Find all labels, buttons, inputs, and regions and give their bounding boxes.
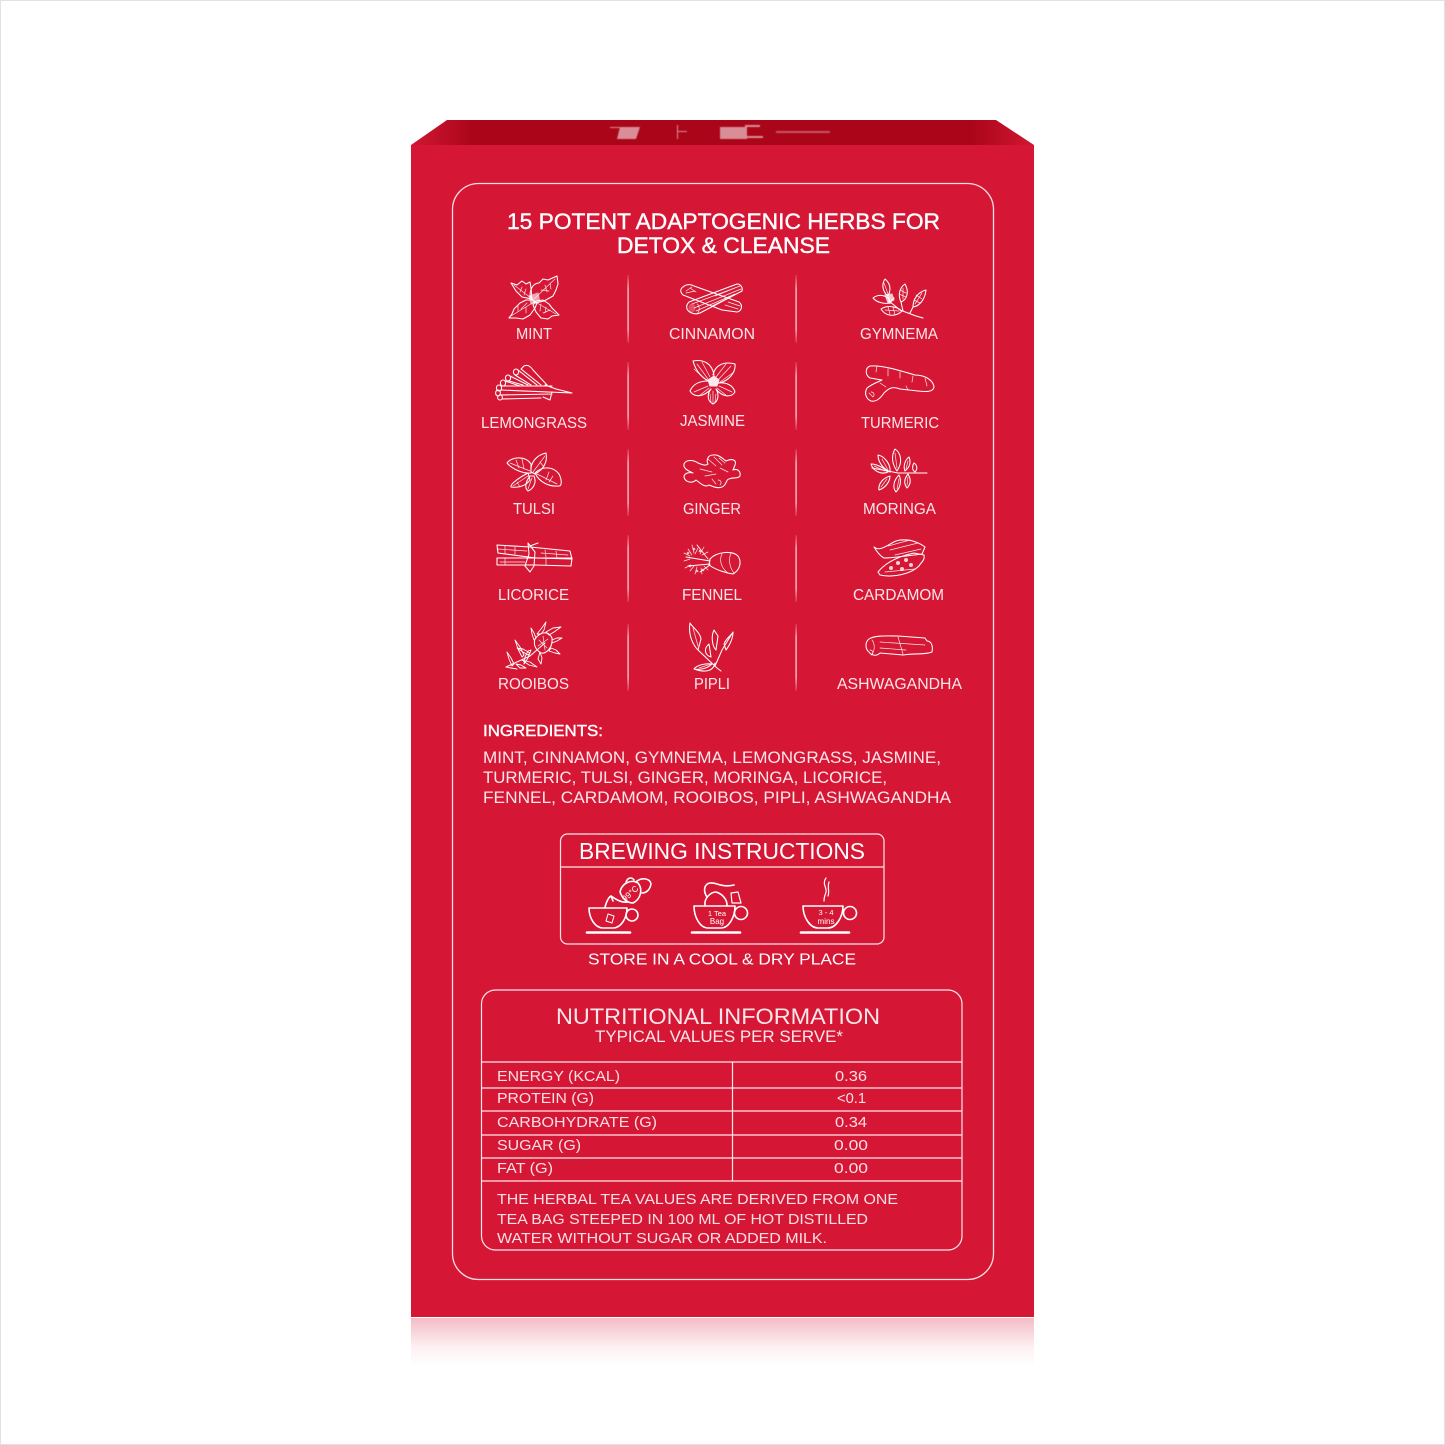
herb: turmeric: TURMERIC: [861, 415, 939, 432]
herb: rooibos: ROOIBOS: [498, 676, 569, 693]
icon: tulsi leaves: [507, 453, 561, 491]
nutrition footnote: TEA BAG STEEPED IN 100 ML OF HOT DISTILLED: [497, 1211, 868, 1228]
panel: nutritional information: [482, 990, 962, 1250]
icon: ashwagandha roots: [866, 636, 932, 655]
herb: cardamom: [853, 540, 944, 604]
icon: steeping cup with steam: [801, 878, 856, 932]
icon: mint leaves: [509, 276, 559, 319]
icon: ginger root: [684, 455, 740, 488]
icon: moringa branch: [871, 449, 927, 492]
nutrition table rows: 0.00: [834, 1137, 868, 1154]
herb: tulsi: [507, 453, 561, 518]
nutrition heading: NUTRITIONAL INFORMATION: [556, 1004, 880, 1029]
herb: fennel: FENNEL: [682, 587, 742, 604]
icon: rooibos sprig: [506, 622, 562, 669]
brewing heading: BREWING INSTRUCTIONS: [579, 838, 865, 864]
nutrition table rows: [497, 1068, 868, 1177]
nutrition table rows: 0.34: [835, 1114, 867, 1131]
icon: tea bag in cup: [692, 883, 748, 932]
nutrition table rows: <0.1: [837, 1090, 866, 1107]
icon: turmeric root: [866, 366, 934, 401]
herb: gymnema: GYMNEMA: [860, 326, 938, 343]
herb: jasmine: [680, 361, 745, 430]
icon: tea bag in cup: 1 Tea: [708, 909, 727, 918]
nutrition table rows: ENERGY (KCAL): [497, 1068, 620, 1085]
ingredients text block: TURMERIC, TULSI, GINGER, MORINGA, LICORICE,: [483, 768, 887, 787]
herb: pipli: PIPLI: [694, 676, 730, 693]
panel: brewing instructions: [560, 834, 884, 944]
herb: mint: MINT: [516, 326, 552, 343]
herb: ashwagandha: [837, 636, 962, 693]
herb: lemongrass: LEMONGRASS: [481, 415, 587, 432]
icon: steeping cup with steam: 3 - 4: [818, 908, 834, 917]
storage note: STORE IN A COOL & DRY PLACE: [588, 952, 856, 968]
heading: [507, 209, 940, 258]
heading: DETOX & CLEANSE: [617, 233, 830, 258]
herb: rooibos: [498, 622, 569, 693]
box top flap: [411, 120, 1034, 145]
nutrition table rows: 0.36: [835, 1068, 867, 1085]
herb: pipli: [690, 623, 733, 693]
icon: lemongrass bundle: [496, 365, 572, 400]
nutrition table rows: CARBOHYDRATE (G): [497, 1114, 657, 1131]
herb: licorice: [497, 543, 572, 604]
heading: 15 POTENT ADAPTOGENIC HERBS FOR: [507, 209, 940, 234]
ingredients text block: INGREDIENTS:: [483, 723, 603, 740]
herb: cinnamon: [669, 284, 755, 343]
nutrition footnote: WATER WITHOUT SUGAR OR ADDED MILK.: [497, 1230, 827, 1247]
herb: turmeric: [861, 366, 939, 432]
herb: ginger: GINGER: [683, 501, 741, 518]
icon: cinnamon sticks: [681, 284, 742, 314]
herb: tulsi: TULSI: [513, 501, 555, 518]
icon: teapot pouring over cup: [587, 878, 651, 932]
herb: mint: [509, 276, 559, 343]
nutrition footnote: THE HERBAL TEA VALUES ARE DERIVED FROM ONE: [497, 1191, 898, 1208]
herb: moringa: [863, 449, 936, 518]
ingredients text block: MINT, CINNAMON, GYMNEMA, LEMONGRASS, JASMINE,: [483, 748, 941, 767]
herb: ginger: [683, 455, 741, 518]
icon: steeping cup with steam: mins: [818, 917, 834, 926]
nutrition table rows: PROTEIN (G): [497, 1090, 594, 1107]
icon: licorice bundle: [497, 543, 572, 572]
herb: fennel: [682, 545, 742, 604]
icon: pipli branch: [690, 623, 733, 671]
herb: lemongrass: [481, 365, 587, 432]
nutrition table rows: SUGAR (G): [497, 1137, 581, 1154]
herb: moringa: MORINGA: [863, 501, 936, 518]
nutrition footnote: [497, 1191, 898, 1247]
nutrition table rows: FAT (G): [497, 1160, 553, 1177]
box front panel: [411, 145, 1034, 1317]
ingredients text block: FENNEL, CARDAMOM, ROOIBOS, PIPLI, ASHWAGANDHA: [483, 788, 952, 807]
herb: cardamom: CARDAMOM: [853, 587, 944, 604]
icon: cardamom pods: [874, 540, 925, 576]
icon: jasmine flower: [690, 361, 735, 404]
icon: fennel bulb: [684, 545, 740, 574]
herb column dividers: [628, 275, 797, 691]
herb: licorice: LICORICE: [498, 587, 569, 604]
nutrition table rows: 0.00: [834, 1160, 868, 1177]
box reflection: [411, 1318, 1034, 1366]
nutrition heading: TYPICAL VALUES PER SERVE*: [595, 1027, 843, 1046]
herb: cinnamon: CINNAMON: [669, 326, 755, 343]
herb: ashwagandha: ASHWAGANDHA: [837, 676, 962, 693]
icon: tea bag in cup: Bag: [710, 917, 724, 926]
herb: gymnema: [860, 279, 938, 343]
ingredients text block: [483, 723, 952, 807]
icon: teapot pouring over cup: 99°C: [620, 883, 640, 903]
inner rounded frame: [452, 184, 994, 1280]
nutrition heading: [556, 1004, 880, 1046]
icon: gymnema sprig: [873, 279, 926, 318]
herb: jasmine: JASMINE: [680, 413, 745, 430]
